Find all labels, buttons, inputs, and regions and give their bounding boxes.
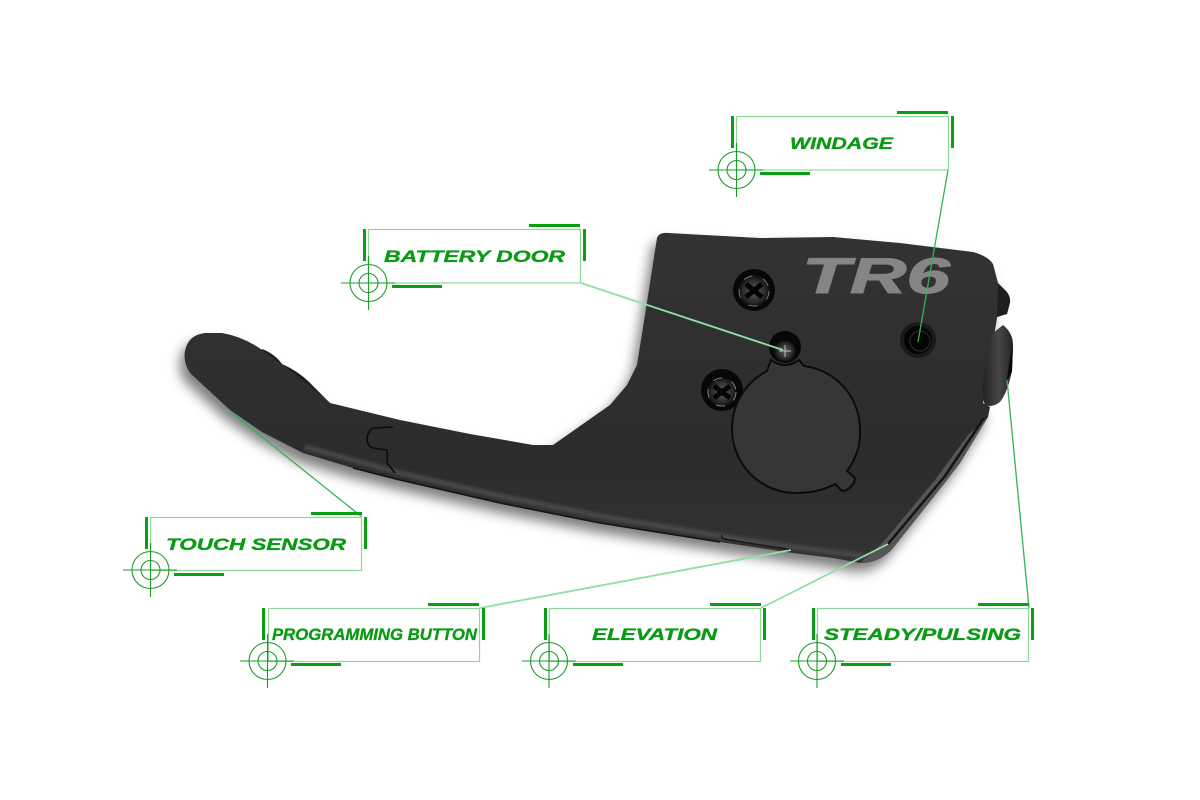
reticle bbox=[123, 543, 177, 597]
battery door bbox=[732, 360, 860, 493]
leader lines bbox=[232, 170, 1029, 608]
reticle bbox=[790, 634, 844, 688]
label: PROGRAMMING BUTTON bbox=[272, 625, 478, 644]
label: BATTERY DOOR bbox=[384, 247, 566, 266]
callout: programming button bbox=[240, 603, 485, 688]
windage adjustment hole bbox=[900, 322, 936, 358]
lever joint notch bbox=[367, 427, 395, 473]
callout: windage bbox=[709, 111, 954, 197]
reticle bbox=[341, 256, 395, 310]
leader: windage bbox=[918, 170, 948, 342]
callout: elevation bbox=[522, 603, 766, 688]
button edge bbox=[1007, 345, 1013, 380]
main body bbox=[185, 233, 998, 563]
label: WINDAGE bbox=[790, 134, 894, 153]
label: ELEVATION bbox=[592, 625, 718, 644]
underside groove bbox=[888, 418, 984, 544]
logo: TR6 bbox=[802, 248, 952, 304]
rear finger ridge bbox=[262, 349, 331, 404]
screw top bbox=[733, 269, 775, 311]
programming button slit bbox=[722, 535, 792, 550]
rear emitter housing bbox=[994, 281, 1010, 318]
side button bbox=[982, 325, 1013, 406]
reticle bbox=[522, 634, 576, 688]
label: STEADY/PULSING bbox=[824, 625, 1021, 644]
screw lower bbox=[701, 369, 743, 411]
lower rim highlight bbox=[305, 447, 870, 557]
leader: elevation bbox=[761, 544, 888, 608]
lower edge line bbox=[353, 468, 720, 542]
laser device bbox=[180, 233, 1013, 572]
leader: touch sensor bbox=[232, 413, 362, 517]
reticle bbox=[240, 634, 294, 688]
screw centre bbox=[769, 331, 801, 363]
callout: battery door bbox=[341, 224, 586, 310]
label: TOUCH SENSOR bbox=[166, 535, 347, 554]
leader: battery door bbox=[581, 283, 783, 350]
drop shadow bbox=[180, 242, 993, 572]
callout: steady/pulsing bbox=[790, 603, 1034, 688]
leader: programming button bbox=[480, 550, 791, 608]
underside rail bbox=[860, 417, 988, 563]
leader: steady/pulsing bbox=[1007, 380, 1029, 608]
callout: touch sensor bbox=[123, 512, 367, 597]
reticle bbox=[709, 143, 763, 197]
